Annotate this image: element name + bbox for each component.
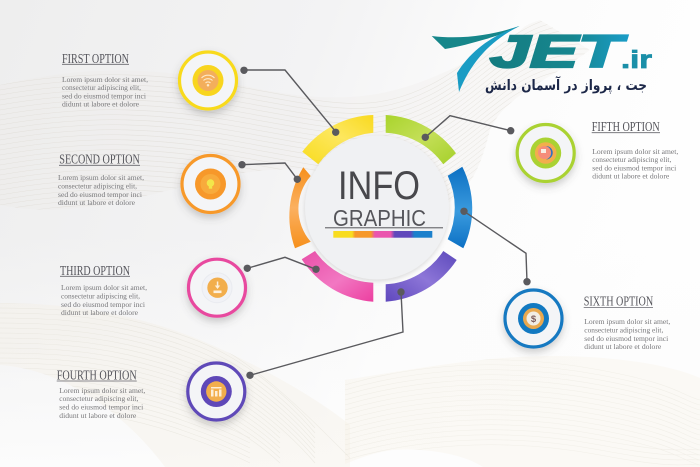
body — [62, 75, 148, 108]
icon: bulb — [207, 179, 214, 189]
central ring diagram — [289, 115, 472, 302]
body: Lorem ipsum dolor sit amet, — [59, 386, 145, 395]
icon: chart — [211, 387, 222, 396]
body: Lorem ipsum dolor sit amet, — [584, 317, 670, 326]
logo: JET.ir — [432, 26, 652, 94]
icon circle: fourth option chart — [188, 363, 245, 420]
logo wordmark: JET — [490, 26, 628, 77]
title: SIXTH OPTION — [584, 294, 653, 309]
segment: yellow — [302, 115, 373, 164]
icon: wifi — [202, 75, 214, 86]
logo wing — [432, 26, 520, 49]
body — [59, 386, 145, 420]
title: THIRD OPTION — [60, 263, 130, 278]
body: didunt ut labore et dolore — [592, 172, 670, 180]
heading: GRAPHIC: GRAPHIC — [333, 205, 426, 231]
body: consectetur adipiscing elit, — [59, 394, 138, 403]
title: FOURTH OPTION — [57, 368, 137, 383]
body: sed do eiusmod tempor inci — [584, 334, 669, 343]
body: didunt ut labore et dolore — [59, 411, 137, 420]
body: Lorem ipsum dolor sit amet, — [592, 147, 678, 156]
text block: third option — [60, 263, 147, 317]
body: sed do eiusmod tempor inci — [592, 164, 677, 172]
body: sed do eiusmod tempor inci — [62, 92, 147, 100]
connector: third option — [244, 257, 320, 273]
body: Lorem ipsum dolor sit amet, — [58, 173, 144, 182]
title: SECOND OPTION — [59, 152, 140, 166]
logo suffix: .ir — [621, 46, 652, 74]
body: consectetur adipiscing elit, — [61, 292, 140, 300]
text block: fifth option — [592, 119, 678, 180]
body: Lorem ipsum dolor sit amet, — [61, 283, 147, 292]
connector: second option — [238, 161, 301, 183]
segment: green — [386, 115, 456, 164]
body — [61, 283, 147, 317]
icon circle: sixth option coin — [505, 290, 562, 347]
logo tagline: جت ، پرواز در آسمان دانش — [485, 76, 647, 94]
title: FIRST OPTION — [62, 51, 129, 66]
icon circle: first option wifi — [180, 52, 236, 109]
body — [584, 317, 670, 351]
text block: second option — [58, 152, 144, 207]
icon: dollar sign: $ — [531, 314, 537, 325]
body: sed do eiusmod tempor inci — [59, 402, 144, 412]
body — [58, 173, 144, 207]
segment: blue — [448, 167, 472, 248]
text block: sixth option — [584, 294, 670, 351]
body: didunt ut labore et dolore — [61, 308, 139, 317]
icon circle: third option download — [188, 259, 246, 316]
connector: fifth option — [422, 116, 514, 141]
segment: orange — [289, 167, 311, 248]
body: Lorem ipsum dolor sit amet, — [62, 75, 148, 84]
heading: INFO: INFO — [338, 164, 420, 208]
body: sed do eiusmod tempor inci — [58, 190, 143, 199]
text block: first option — [62, 51, 148, 108]
divider line — [325, 227, 443, 228]
icon: download — [214, 282, 222, 293]
segment: purple — [386, 251, 457, 302]
colour bar — [333, 231, 432, 238]
body: consectetur adipiscing elit, — [58, 182, 137, 190]
icon: pie chart — [538, 146, 553, 160]
connector: sixth option — [460, 208, 531, 285]
text block: fourth option — [57, 368, 145, 420]
body — [592, 147, 678, 180]
connector: first option — [240, 67, 339, 136]
body: consectetur adipiscing elit, — [62, 83, 141, 92]
segment: pink — [302, 251, 373, 302]
icon circle: fifth option pie — [517, 124, 574, 182]
center disc — [305, 136, 449, 280]
body: didunt ut labore et dolore — [58, 198, 136, 207]
icon circle: second option bulb — [182, 156, 239, 212]
body: sed do eiusmod tempor inci — [61, 300, 146, 309]
logo tail — [457, 26, 520, 92]
body: consectetur adipiscing elit, — [584, 326, 663, 334]
body: didunt ut labore et dolore — [62, 100, 140, 108]
connector: fourth option — [246, 288, 405, 379]
body: didunt ut labore et dolore — [584, 342, 662, 351]
body: consectetur adipiscing elit, — [592, 155, 671, 164]
title: FIFTH OPTION — [592, 119, 660, 134]
